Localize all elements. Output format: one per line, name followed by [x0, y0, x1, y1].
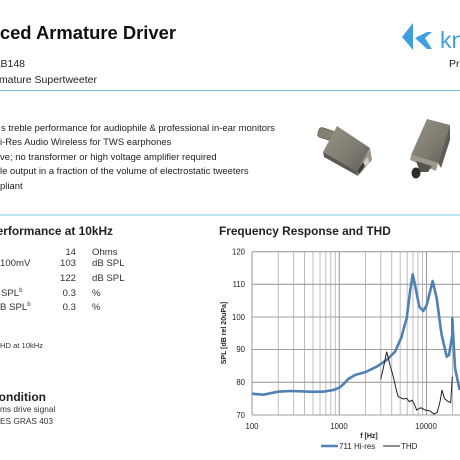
- test condition heading: ondition: [0, 390, 46, 404]
- x-axis labels: 1000: [330, 422, 348, 431]
- spec values: dB SPL: [92, 258, 125, 269]
- spec labels: 100mV: [0, 258, 30, 269]
- product type: mature Supertweeter: [0, 74, 97, 86]
- feature list: [0, 123, 275, 192]
- logo: [402, 23, 460, 53]
- feature list: pliant: [0, 181, 23, 192]
- feature list: ve; no transformer or high voltage amplifier required: [0, 152, 217, 163]
- feature list: i-Res Audio Wireless for TWS earphones: [0, 137, 171, 148]
- brand tagline: Pr: [449, 58, 460, 70]
- y-axis labels: 100: [232, 313, 246, 322]
- test condition text: ES GRAS 403: [0, 416, 53, 426]
- driver right: [410, 119, 450, 178]
- product photos: [317, 119, 450, 178]
- spec labels: B SPLb: [0, 302, 31, 313]
- x-axis labels: 100: [245, 422, 259, 431]
- spec values: 103: [60, 258, 76, 269]
- legend: [321, 442, 418, 451]
- feature list: s treble performance for audiophile & professional in-ear monitors: [1, 123, 275, 134]
- spec values: %: [92, 288, 101, 299]
- y-axis labels: [232, 248, 246, 420]
- spec values: %: [92, 302, 101, 313]
- chart: frequency response and THD: [220, 248, 460, 451]
- performance heading: erformance at 10kHz: [0, 224, 113, 238]
- y-axis labels: 80: [236, 378, 246, 387]
- driver left: [317, 126, 372, 176]
- x-axis title: f [Hz]: [360, 433, 378, 440]
- test condition text: [0, 404, 55, 426]
- spec values: 14: [65, 247, 76, 258]
- spec values: 0.3: [63, 302, 76, 313]
- y-axis title: SPL [dB rel 20uPa]: [221, 302, 228, 364]
- x-axis labels: [245, 422, 438, 431]
- y-axis labels: 70: [236, 411, 246, 420]
- spec labels: SPLb: [1, 288, 22, 299]
- spec values: dB SPL: [92, 273, 125, 284]
- y-axis labels: 120: [232, 248, 246, 256]
- chart heading: Frequency Response and THD: [219, 224, 391, 238]
- grid: [278, 252, 452, 415]
- spec values: [60, 247, 125, 313]
- legend: THD: [401, 442, 418, 451]
- header divider: [0, 90, 460, 91]
- spec values: 122: [60, 273, 76, 284]
- test condition text: ms drive signal: [0, 404, 55, 414]
- y-axis labels: 90: [236, 345, 246, 354]
- SPL curve: [252, 274, 460, 395]
- spec values: 0.3: [63, 288, 76, 299]
- section divider: [0, 214, 460, 216]
- panel: performance: [0, 224, 125, 313]
- title: ced Armature Driver: [0, 22, 176, 43]
- feature list: le output in a fraction of the volume of electrostatic tweeters: [0, 166, 249, 177]
- THD curve: [381, 352, 452, 414]
- spec values: Ohms: [92, 247, 118, 258]
- y-axis labels: 110: [233, 280, 246, 289]
- x-axis labels: 10000: [415, 422, 438, 431]
- footnote: HD at 10kHz: [0, 341, 43, 350]
- spec labels: [0, 258, 31, 313]
- legend: 711 Hi-res: [339, 442, 375, 451]
